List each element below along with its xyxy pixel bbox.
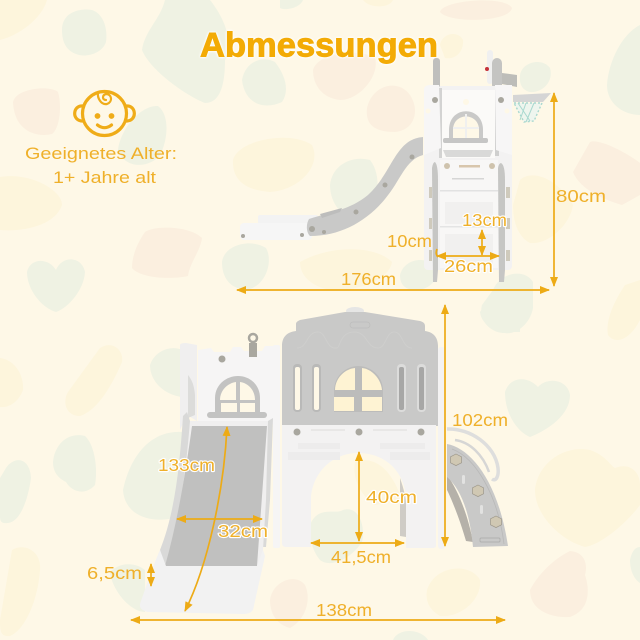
dimension: 26cm step width: 26cm xyxy=(444,256,493,276)
age callout xyxy=(25,92,177,187)
slide xyxy=(140,412,273,614)
stair with handrail xyxy=(447,429,508,547)
rocker legs xyxy=(429,162,510,282)
front view of the playset xyxy=(140,307,508,614)
dimension: 102cm height: 102cm xyxy=(452,410,508,430)
left tower wall xyxy=(180,334,275,430)
dimension: 10cm xyxy=(387,231,438,257)
dimension: 40cm arch height: 40cm xyxy=(366,487,417,507)
strip between tower and castle xyxy=(273,345,280,548)
tower posts xyxy=(424,58,512,158)
grey castle wall xyxy=(282,307,438,426)
dimension: 10cm: 10cm xyxy=(387,231,432,251)
dimension: 80cm height: 80cm xyxy=(556,186,606,206)
dimension: 41,5cm arch width: 41,5cm xyxy=(331,547,391,567)
dimension: 6,5cm edge height xyxy=(87,563,151,586)
slide profile xyxy=(240,137,423,240)
dimension: 26cm step width xyxy=(437,256,499,276)
dimension: 6,5cm edge height: 6,5cm xyxy=(87,563,142,583)
white lower wall with arch xyxy=(282,425,436,548)
side window xyxy=(443,111,488,143)
dimension: 13cm step height xyxy=(462,210,507,255)
hoop and net xyxy=(513,93,551,122)
tower window xyxy=(207,376,267,418)
age text line 1: Geeignetes Alter: xyxy=(25,144,177,163)
title: Abmessungen xyxy=(200,26,438,64)
castle window xyxy=(334,366,383,412)
age text line 2: 1+ Jahre alt xyxy=(53,168,156,187)
dimension: 133cm slide length: 133cm xyxy=(158,455,215,475)
dimension: 138cm total width: 138cm xyxy=(316,600,372,620)
brick relief and bolts xyxy=(288,428,430,460)
tower body xyxy=(424,86,512,270)
arch inner side xyxy=(400,478,406,537)
side view of the slide xyxy=(240,50,551,282)
dimension: 40cm arch height xyxy=(359,452,417,541)
slots xyxy=(293,364,426,412)
dimension: 41,5cm arch width xyxy=(311,543,404,567)
dimension: 32cm slide width xyxy=(177,519,268,541)
icon: baby face xyxy=(75,92,134,136)
backboard xyxy=(485,50,517,90)
steps xyxy=(440,160,498,268)
right post xyxy=(438,347,445,549)
ring knob xyxy=(249,334,257,357)
dimension: 13cm step height: 13cm xyxy=(462,210,507,230)
dimension: 133cm slide length xyxy=(158,427,227,611)
dimension: 176cm length: 176cm xyxy=(341,269,396,289)
dimension: 32cm slide width: 32cm xyxy=(218,521,268,541)
